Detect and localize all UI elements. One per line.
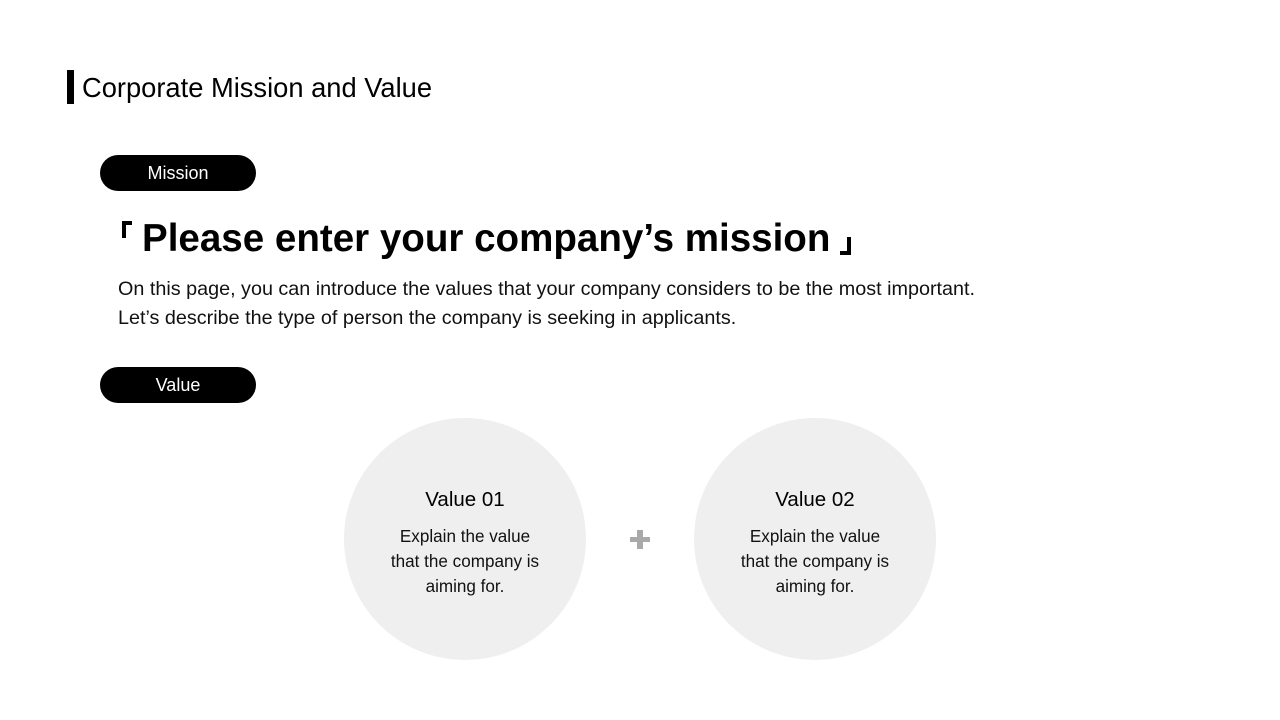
opening corner bracket (122, 221, 132, 238)
mission description: On this page, you can introduce the values that your company considers to be the most important. (118, 278, 975, 300)
value 02 description: Explain the value (750, 527, 880, 546)
value 01 description: that the company is (391, 552, 539, 571)
value 02 description (741, 527, 889, 596)
value 02 description: aiming for. (776, 577, 854, 596)
value 01 heading: Value 01 (425, 488, 505, 511)
pill label: mission (100, 155, 256, 191)
heading accent bar (67, 70, 74, 104)
pill label: value: Value (156, 375, 200, 395)
icon: plus sign (630, 530, 650, 549)
mission statement headline (122, 217, 851, 260)
panel: value 01 circle (344, 418, 586, 660)
pill label: value (100, 367, 256, 403)
value 02 description: that the company is (741, 552, 889, 571)
page title: Corporate Mission and Value (82, 72, 432, 103)
mission description: Let’s describe the type of person the company is seeking in applicants. (118, 307, 736, 329)
value 01 description: Explain the value (400, 527, 530, 546)
mission description (118, 278, 975, 329)
value 01 description (391, 527, 539, 596)
panel: value 02 circle (694, 418, 936, 660)
closing corner bracket (840, 237, 851, 255)
value 01 description: aiming for. (426, 577, 504, 596)
pill label: mission: Mission (147, 163, 208, 183)
value 02 heading: Value 02 (775, 488, 855, 511)
mission headline text: Please enter your company’s mission (142, 217, 830, 260)
